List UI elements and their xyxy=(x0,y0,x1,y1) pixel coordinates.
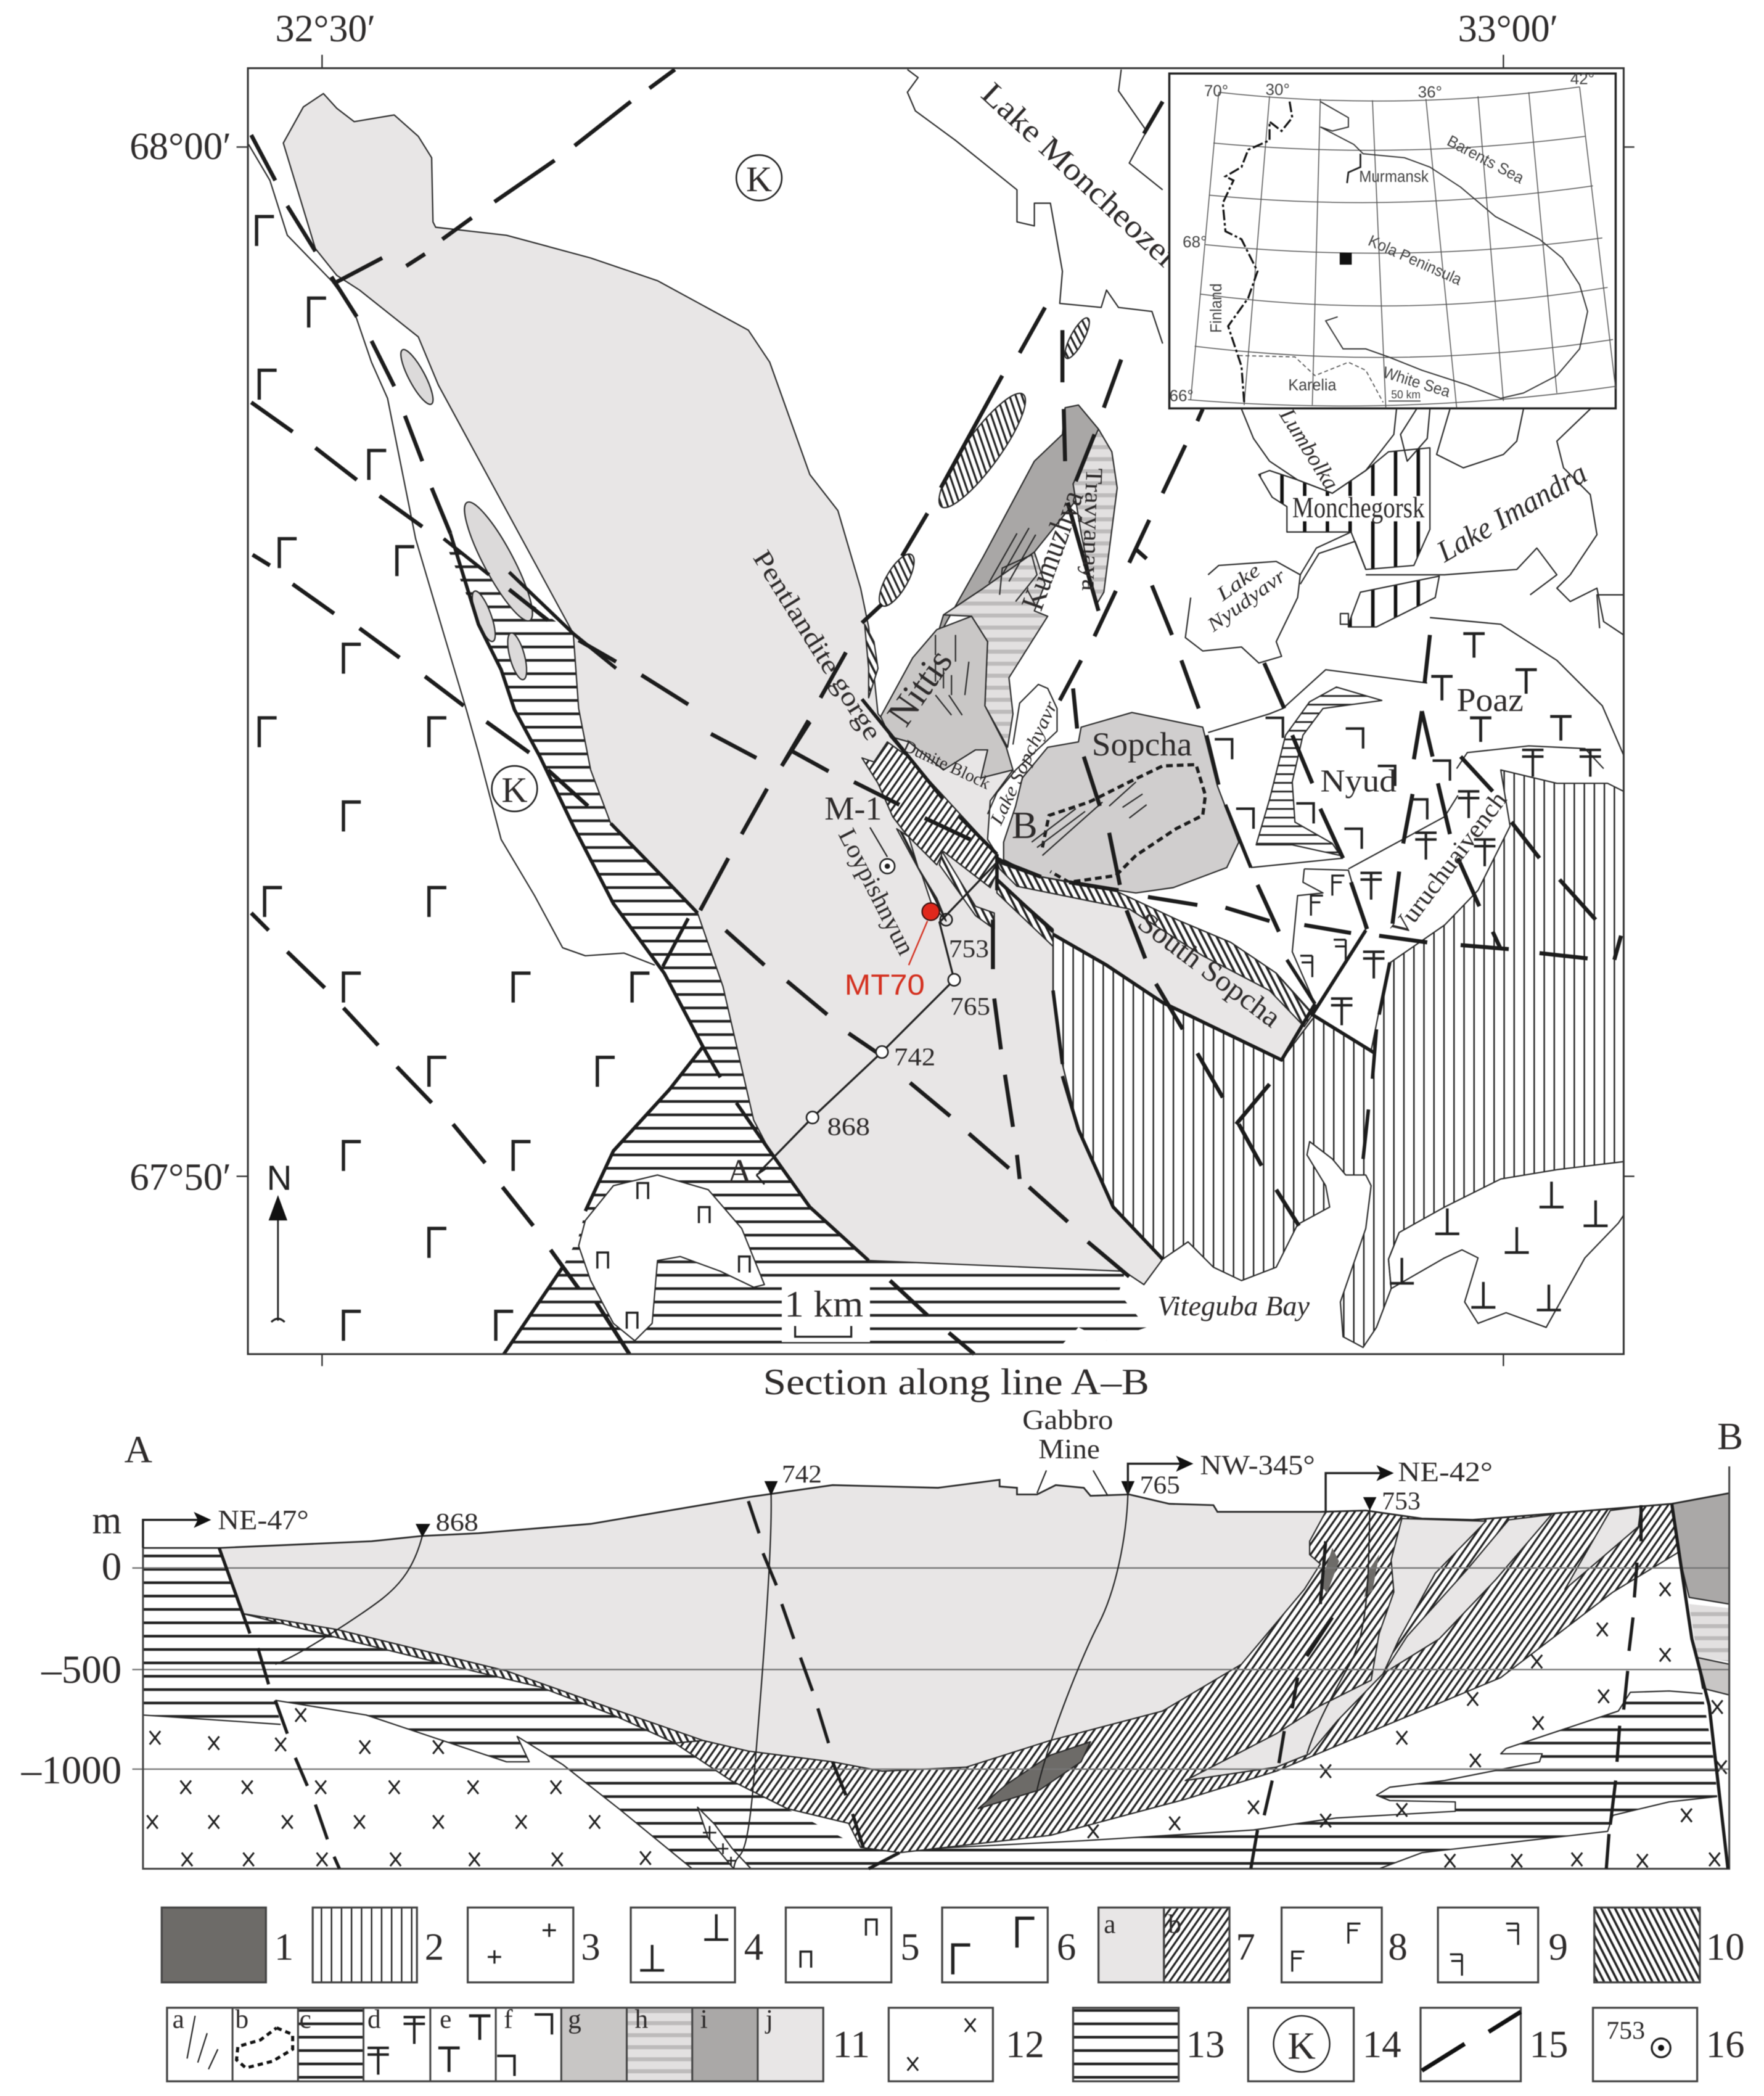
section small dark spots xyxy=(1320,1548,1379,1597)
legend 11: a xyxy=(173,2004,184,2034)
legend 6: 6 xyxy=(1057,1925,1076,1968)
legend 2 xyxy=(313,1907,444,1983)
legend 11: h xyxy=(635,2004,649,2034)
labels: place names: A xyxy=(727,1153,752,1191)
hatched strips: unit 10 xyxy=(864,624,1312,1027)
inset labels: 70° xyxy=(1204,81,1228,100)
section symbols: unit 12 xyxy=(147,1583,1726,1867)
section line A-B with boreholes xyxy=(757,828,997,1185)
Monchegorsk striped block xyxy=(1259,448,1430,569)
Nittis block xyxy=(880,616,1013,778)
legend 11: d xyxy=(367,2004,381,2034)
section main grey bowl xyxy=(219,1480,1326,1771)
inset labels: Karelia xyxy=(1288,376,1337,394)
legend 11: g xyxy=(568,2004,581,2034)
white gabbro inclusion xyxy=(578,1175,765,1341)
section direction arrows: NW-345° xyxy=(1200,1449,1315,1481)
section borehole labels: 753 xyxy=(1382,1486,1421,1514)
labels: place names: B xyxy=(1012,803,1038,847)
legend 11: 11 xyxy=(832,2023,870,2066)
Dunite Block xyxy=(890,736,1013,854)
Travyanaya striped block xyxy=(1073,429,1117,606)
section Sopcha dark block xyxy=(1672,1493,1729,1604)
legend 13: 13 xyxy=(1186,2023,1225,2066)
section faults xyxy=(219,1501,1728,1868)
inset coastline xyxy=(1320,102,1588,398)
legend 16: 16 xyxy=(1706,2023,1745,2066)
Kumuzhya south striped block xyxy=(943,552,1048,747)
legend 7: 7 xyxy=(1236,1925,1255,1968)
scale bar: 1 km: 1 km xyxy=(784,1284,863,1325)
map frame xyxy=(248,68,1623,1354)
small grey lenses xyxy=(395,346,543,681)
Kumuzhya darker block xyxy=(935,405,1099,642)
coordinate labels: 67°50′ xyxy=(129,1155,231,1198)
section borehole labels xyxy=(436,1460,1421,1536)
symbols: unit 6 xyxy=(256,216,649,1341)
inset Murmansk inlet xyxy=(1347,154,1360,183)
legend 9 xyxy=(1438,1907,1568,1983)
labels: place names: South Sopcha xyxy=(1132,906,1287,1034)
dashed faults: unit 15 xyxy=(251,70,1621,1354)
label: K circle north xyxy=(736,155,782,200)
labels: place names: Loypishnyun xyxy=(833,824,921,960)
inset labels: 50 km xyxy=(1391,388,1421,401)
legend 10: 10 xyxy=(1706,1925,1745,1968)
legend 5: 5 xyxy=(900,1925,920,1968)
symbols: units 8 and 9 xyxy=(1300,876,1346,977)
legend 13 xyxy=(1073,2008,1225,2081)
labels: place names: Kumuzhya xyxy=(1015,486,1091,615)
label: K circle west: K xyxy=(501,770,528,810)
coordinate labels: 32°30′ xyxy=(275,7,375,50)
section Gabbro Mine label: Mine xyxy=(1038,1433,1100,1465)
labels: place names: Dunite Block xyxy=(900,736,993,794)
hatched lenses north of Nittis xyxy=(872,315,1094,611)
legend 8: 8 xyxy=(1388,1925,1408,1968)
legend 16: 753 xyxy=(1606,2016,1645,2044)
legend 2: 2 xyxy=(425,1925,444,1968)
inset graticule xyxy=(1188,87,1615,408)
labels: place names: Vuruchuaivench xyxy=(1385,786,1512,942)
heading: section along line A-B: Section along line A–B xyxy=(763,1362,1149,1403)
section axis labels: m xyxy=(92,1498,121,1542)
coordinate labels: 68°00′ xyxy=(129,125,231,168)
labels: place names: 765 xyxy=(950,992,990,1020)
section hatched layer: unit 7b xyxy=(675,1504,1681,1852)
labels: place names: M-1 xyxy=(824,790,882,827)
Sopcha block xyxy=(1004,712,1239,893)
legend 3: 3 xyxy=(581,1925,601,1968)
section axis labels: 0 xyxy=(102,1545,121,1589)
labels: place names: Lake Moncheozero xyxy=(975,76,1198,287)
legend 5 xyxy=(786,1907,920,1983)
section direction arrows xyxy=(143,1449,1493,1548)
section borehole labels: 868 xyxy=(436,1508,478,1536)
section Gabbro Mine label xyxy=(1022,1403,1113,1496)
legend 1 xyxy=(162,1907,293,1983)
section striped block xyxy=(1689,1604,1729,1661)
inset labels: 66° xyxy=(1169,386,1194,405)
labels: place names: Lake xyxy=(1212,559,1265,606)
section axis labels: –1000 xyxy=(21,1748,121,1793)
section granite lens with plus signs xyxy=(697,1807,751,1868)
labels: place names: Travyanaya xyxy=(1077,467,1107,591)
label: MT70: MT70 xyxy=(845,969,925,1001)
section direction arrows: NE-42° xyxy=(1398,1456,1493,1487)
label: K circle north: K xyxy=(746,159,772,199)
legend 14: K xyxy=(1287,2024,1316,2067)
bay and unit 4 shoreline xyxy=(1389,1215,1623,1328)
section borehole labels: 765 xyxy=(1140,1470,1180,1498)
legend 7: a xyxy=(1104,1910,1116,1939)
labels: place names: 868 xyxy=(827,1112,870,1140)
dyke swarm lines and small contours xyxy=(935,528,1147,855)
scale-label background xyxy=(782,1286,870,1342)
labels: place names: Sopcha xyxy=(1092,726,1192,763)
section lower grey block xyxy=(1697,1658,1729,1695)
section grey strips xyxy=(1186,1506,1641,1780)
inset labels: Murmansk xyxy=(1359,167,1429,186)
ore-bearing dashed contour, Sopcha xyxy=(1043,765,1205,882)
legend 15 xyxy=(1421,2008,1568,2081)
legend 4 xyxy=(631,1907,763,1983)
labels: place names: 742 xyxy=(894,1043,935,1071)
coordinate ticks xyxy=(237,55,1635,1366)
legend 11 xyxy=(167,2004,870,2081)
section elevation grid lines xyxy=(133,1568,1729,1769)
section axis labels: –500 xyxy=(41,1648,121,1692)
north arrow: N xyxy=(267,1158,292,1197)
legend 11: e xyxy=(440,2004,451,2034)
lake and contour outlines xyxy=(248,70,1623,1004)
section unit 13 layers xyxy=(143,1548,1717,1868)
legend 11: b xyxy=(235,2004,248,2034)
inset labels: 36° xyxy=(1418,83,1442,101)
section basal strip: unit 10 xyxy=(242,1613,703,1743)
inset labels: 68° xyxy=(1183,232,1207,251)
section lower contours xyxy=(143,1691,1717,1868)
legend 14: 14 xyxy=(1363,2023,1401,2066)
labels: place names: Lake Sopchyavr xyxy=(985,698,1061,829)
labels: place names: Lumbolka xyxy=(1274,403,1344,494)
section borehole labels: 742 xyxy=(782,1460,822,1488)
section axis labels xyxy=(21,1415,1743,1793)
thick geological boundaries xyxy=(444,533,1390,1354)
unit 2: vertical stripes xyxy=(1053,770,1623,1347)
section direction arrows: NE-47° xyxy=(218,1504,309,1535)
inset labels: Finland xyxy=(1207,284,1225,333)
inset state border xyxy=(1223,102,1292,402)
labels: place names: Nyudyavr xyxy=(1203,565,1290,636)
legend 3 xyxy=(468,1907,601,1983)
section axis labels: B xyxy=(1717,1415,1743,1458)
legend 4: 4 xyxy=(744,1925,763,1968)
legend xyxy=(162,1907,1745,2081)
unit 13 wedge: horizontal lines xyxy=(444,539,1147,1354)
symbols: unit 4 xyxy=(1390,1182,1607,1310)
inset labels: 30° xyxy=(1266,80,1290,99)
section Gabbro Mine label: Gabbro xyxy=(1022,1403,1113,1435)
section boreholes xyxy=(275,1481,1376,1868)
section dark lens: unit 1 xyxy=(978,1742,1091,1809)
legend 16 xyxy=(1593,2008,1745,2081)
legend 12 xyxy=(888,2008,1044,2081)
symbols: unit 11f xyxy=(1215,718,1450,849)
inset labels: White Sea xyxy=(1380,363,1453,401)
symbols: unit 11d xyxy=(1331,750,1601,1025)
Nyud horizontal-lined lens xyxy=(1256,687,1382,855)
main intrusion: light grey massif xyxy=(283,94,1315,1284)
label: K circle west xyxy=(492,766,537,812)
symbols: unit 5 xyxy=(597,1183,750,1329)
panel: geological map xyxy=(237,55,1635,1366)
labels: place names: 753 xyxy=(949,934,989,963)
inset: location map of Kola Peninsula xyxy=(1169,70,1615,408)
legend 15: 15 xyxy=(1530,2023,1568,2066)
inset Karelia border xyxy=(1239,356,1383,402)
legend 12: 12 xyxy=(1006,2023,1044,2066)
legend 1: 1 xyxy=(274,1925,293,1968)
lower striped block near Lake Imandra xyxy=(1340,576,1439,627)
legend 8 xyxy=(1282,1907,1408,1983)
hatched gorge body: unit 7b xyxy=(862,742,997,887)
legend 7 xyxy=(1099,1907,1255,1983)
inset frame xyxy=(1169,73,1615,408)
labels: place names: Pentlandite gorge xyxy=(747,545,888,746)
legend 6 xyxy=(942,1907,1076,1983)
labels: place names: Nittis xyxy=(879,642,961,733)
panel: cross-section A-B xyxy=(21,1403,1743,1868)
labels: place names: Nyud xyxy=(1320,763,1397,799)
coordinate labels: 33°00′ xyxy=(1458,7,1558,50)
legend 11: f xyxy=(504,2004,513,2034)
legend 11: c xyxy=(300,2004,311,2034)
legend 11: j xyxy=(765,2004,773,2034)
section axis labels: A xyxy=(125,1428,152,1471)
legend 10 xyxy=(1594,1907,1745,1983)
north arrow xyxy=(267,1158,292,1322)
legend 14 xyxy=(1248,2008,1401,2081)
inset location square xyxy=(1340,253,1352,265)
map background xyxy=(248,68,1623,1354)
inset labels: Barents Sea xyxy=(1444,131,1527,187)
Monchegorsk label background xyxy=(1292,496,1426,521)
labels: place names: Monchegorsk xyxy=(1292,492,1425,524)
legend 7: b xyxy=(1168,1910,1181,1939)
inset labels: 42° xyxy=(1570,70,1594,88)
inset labels xyxy=(1169,70,1594,405)
labels: place names: Poaz xyxy=(1456,681,1524,718)
coordinate labels xyxy=(129,7,1558,1198)
legend 9: 9 xyxy=(1549,1925,1568,1968)
sample location MT70 marker xyxy=(909,903,940,965)
section surface and frame xyxy=(143,1466,1729,1868)
inset labels: Kola Peninsula xyxy=(1366,231,1465,289)
labels: place names xyxy=(727,76,1593,1321)
legend 11: i xyxy=(700,2004,708,2034)
labels: place names: Viteguba Bay xyxy=(1157,1290,1310,1321)
labels: place names: Lake Imandra xyxy=(1430,456,1593,569)
symbols: unit 11e xyxy=(1431,634,1572,742)
